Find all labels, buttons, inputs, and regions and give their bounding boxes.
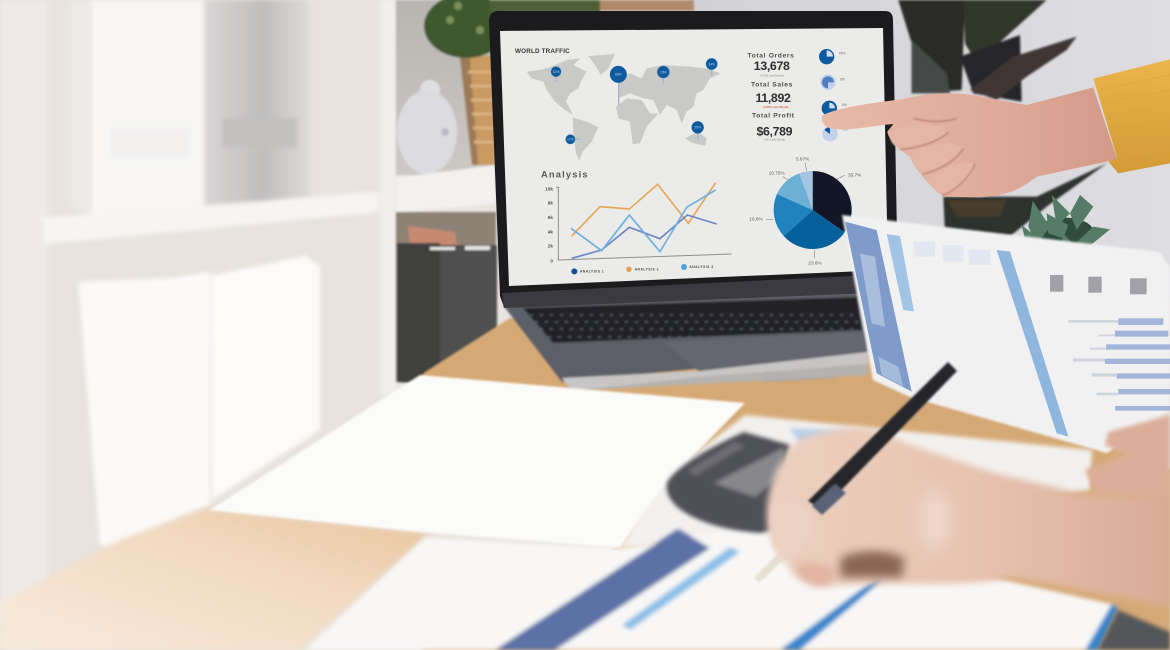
line chart: 10k bbox=[545, 186, 553, 191]
basket bbox=[460, 55, 495, 165]
chart legend bbox=[571, 264, 714, 274]
pen bbox=[754, 362, 957, 582]
report header cells bbox=[913, 242, 990, 265]
world traffic title: WORLD TRAFFIC bbox=[515, 48, 570, 55]
dashboard content: 68% bbox=[615, 73, 622, 77]
chart legend: ANALYSIS 3 bbox=[689, 265, 714, 269]
lower white binders bbox=[78, 272, 210, 548]
upper white binder bbox=[70, 0, 203, 219]
blurred paper, left bbox=[210, 375, 745, 548]
line chart bbox=[545, 183, 732, 263]
dashboard content: 30% bbox=[694, 126, 701, 130]
line chart: 4k bbox=[548, 229, 553, 234]
dashboard content: 16% bbox=[660, 70, 667, 74]
lower alcove contents bbox=[396, 212, 496, 382]
pointing hand bbox=[822, 87, 1117, 197]
upper grey canister bbox=[206, 0, 310, 208]
dark floor corner bbox=[1098, 610, 1170, 650]
laptop bbox=[489, 11, 898, 391]
line chart: 6k bbox=[548, 215, 553, 220]
large dark houseplant bbox=[898, 0, 1107, 242]
holding hand, right bbox=[1085, 415, 1170, 500]
table surface, lower left bbox=[0, 508, 430, 650]
laptop base and keyboard bbox=[503, 292, 868, 391]
chart legend: ANALYSIS 1 bbox=[580, 269, 604, 273]
total orders: Total Orders bbox=[747, 52, 795, 59]
fingers of the fist bbox=[890, 118, 975, 195]
chart legend: ANALYSIS 2 bbox=[635, 267, 659, 271]
held report, right bbox=[842, 215, 1170, 453]
line chart: 2k bbox=[548, 244, 553, 249]
pie chart: 23.6% bbox=[808, 261, 822, 266]
total orders: $6,789 bbox=[756, 124, 793, 138]
pie chart: 10.75% bbox=[769, 170, 785, 175]
total sales: Total Sales bbox=[751, 82, 793, 89]
bottom report bbox=[305, 525, 1118, 650]
table surface, upper bbox=[400, 318, 1170, 650]
line chart: 8k bbox=[548, 201, 553, 206]
writing arm and hand bbox=[767, 427, 1170, 607]
yellow sleeve bbox=[1093, 59, 1170, 173]
pie chart: 35.7% bbox=[848, 172, 861, 177]
report blue stripe bbox=[997, 250, 1068, 437]
report side band bbox=[845, 222, 912, 392]
small progress pies: 0% bbox=[842, 103, 847, 107]
world map bbox=[527, 54, 721, 161]
small progress pies bbox=[819, 49, 848, 142]
pie chart: 5.67% bbox=[796, 157, 809, 162]
dashboard content: 17% bbox=[567, 138, 574, 142]
total orders: 11,892 bbox=[755, 91, 791, 105]
pie chart bbox=[749, 157, 861, 266]
map pins bbox=[551, 58, 717, 144]
dashboard content bbox=[515, 48, 861, 274]
total orders: +1% Last Month bbox=[764, 138, 785, 142]
small progress pies: 0% bbox=[840, 78, 845, 82]
shelving unit bbox=[0, 0, 396, 620]
dashboard content: 34% bbox=[708, 62, 715, 66]
calculator bbox=[667, 432, 790, 533]
shelf board bbox=[42, 192, 378, 244]
plant foliage bbox=[424, 0, 508, 58]
total orders bbox=[747, 52, 795, 142]
report bar rows bbox=[1105, 318, 1170, 411]
succulent plant bbox=[1022, 195, 1110, 248]
small progress pies: 9% bbox=[843, 128, 848, 132]
laptop screen bbox=[500, 28, 888, 286]
laptop lid bbox=[489, 11, 898, 307]
total orders: 13,678 bbox=[754, 59, 790, 73]
vertical divider bbox=[380, 0, 396, 395]
shelf alcove bbox=[396, 0, 694, 385]
small progress pies: 75% bbox=[839, 51, 845, 55]
total orders: -4.25% Last Month bbox=[762, 105, 789, 109]
pie chart: 16.8% bbox=[749, 217, 763, 222]
finger over pen grip bbox=[771, 502, 815, 562]
document on table, lower bbox=[620, 415, 1092, 548]
line chart: 0 bbox=[550, 258, 553, 263]
total profit: Total Profit bbox=[752, 113, 795, 120]
alcove shelf bbox=[396, 165, 495, 212]
dashboard content: 12% bbox=[553, 70, 559, 74]
analysis title: Analysis bbox=[541, 170, 589, 180]
total orders: +5.5% Last Month bbox=[760, 73, 784, 77]
white ceramic vase bbox=[397, 80, 457, 174]
